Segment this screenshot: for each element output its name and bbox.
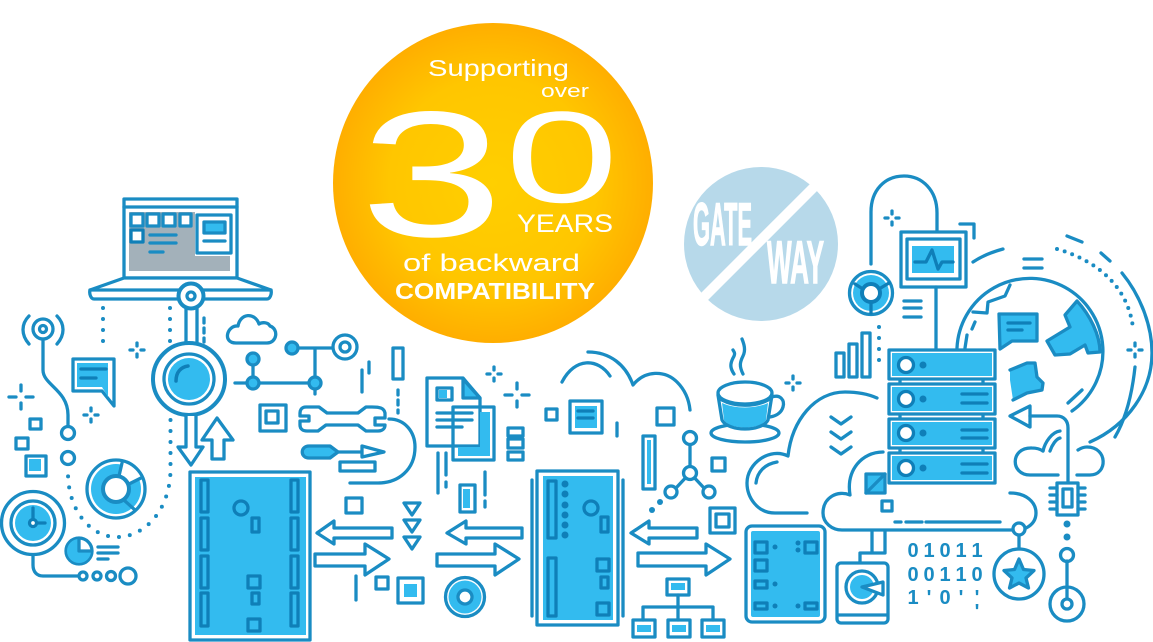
icon: clock (2, 492, 136, 584)
text: of backward: of backward (403, 250, 580, 277)
numeral 0: 0 (505, 85, 619, 230)
badge: gateway: GATE (693, 191, 752, 258)
icon: disc (446, 578, 484, 616)
icon: arrows right pair (631, 521, 730, 575)
icon: target pin (1050, 520, 1084, 621)
text: COMPATIBILITY: COMPATIBILITY (395, 278, 595, 304)
icon: arrows middle pair (437, 521, 522, 575)
icon: laptop (90, 199, 271, 299)
icon: node network (235, 335, 357, 394)
badge: gateway: WAY (767, 229, 824, 296)
icon: list stack (508, 428, 523, 460)
small squares left (16, 419, 46, 476)
dotted trails (68, 308, 170, 537)
panel: right device (746, 526, 825, 622)
icon: binary digits: 00110 (907, 564, 983, 586)
icon: up arrow (202, 418, 233, 459)
badge: 30 years of backward compatibility (333, 23, 653, 343)
icon: small donut gauge (850, 272, 892, 314)
icon: document pair (427, 378, 494, 460)
icon: binary digits: 01011 (907, 540, 983, 562)
icon: globe (957, 259, 1103, 411)
bars under document (438, 453, 485, 512)
icon: disk drive (837, 531, 888, 623)
icon: binary digits (907, 540, 983, 623)
arrow to globe (1010, 406, 1068, 483)
icon: monitor with pulse (871, 176, 974, 350)
icon: wrench (300, 407, 385, 431)
orbit arcs around globe (973, 236, 1152, 442)
icon: hierarchy (633, 579, 724, 637)
decorative bars near tools (346, 348, 403, 513)
panel: server rack (889, 350, 995, 483)
sparkles (9, 211, 1142, 422)
icon: small pie chart with lines (66, 538, 118, 564)
panel: left device (190, 472, 310, 640)
icon: binary digits: ' (975, 601, 979, 623)
icon: split cloud right (1015, 431, 1103, 475)
connector curve (350, 419, 415, 483)
bottom square cluster (356, 576, 423, 603)
icon: lower cloud (823, 452, 1036, 530)
icon: donut chart (87, 460, 145, 518)
icon: arrows left pair (315, 521, 392, 575)
lines and bar chart (836, 301, 921, 377)
icon: screwdriver (302, 446, 384, 471)
text: over: over (541, 81, 589, 101)
icon: coffee cup (711, 339, 783, 442)
icon: triangles (404, 503, 420, 549)
numeral 3: 3 (360, 75, 503, 275)
badge: gateway (684, 167, 838, 321)
icon: microchip (1050, 483, 1085, 515)
text: YEARS: YEARS (517, 210, 613, 238)
icon: big cloud (747, 392, 877, 513)
icon: binary digits: 1'0'' (907, 587, 979, 609)
text: Supporting: Supporting (428, 55, 569, 81)
icon: cloud small (227, 316, 276, 343)
icon: outline cloud top (546, 352, 690, 436)
bar and node tree (643, 432, 735, 533)
icon: central connector with big lens (153, 284, 225, 465)
panel: middle device (532, 471, 623, 625)
icon: antenna (23, 316, 74, 464)
icon: chat bubble left (73, 359, 114, 406)
icon: square target (260, 405, 286, 431)
icon: star badge (994, 523, 1044, 599)
